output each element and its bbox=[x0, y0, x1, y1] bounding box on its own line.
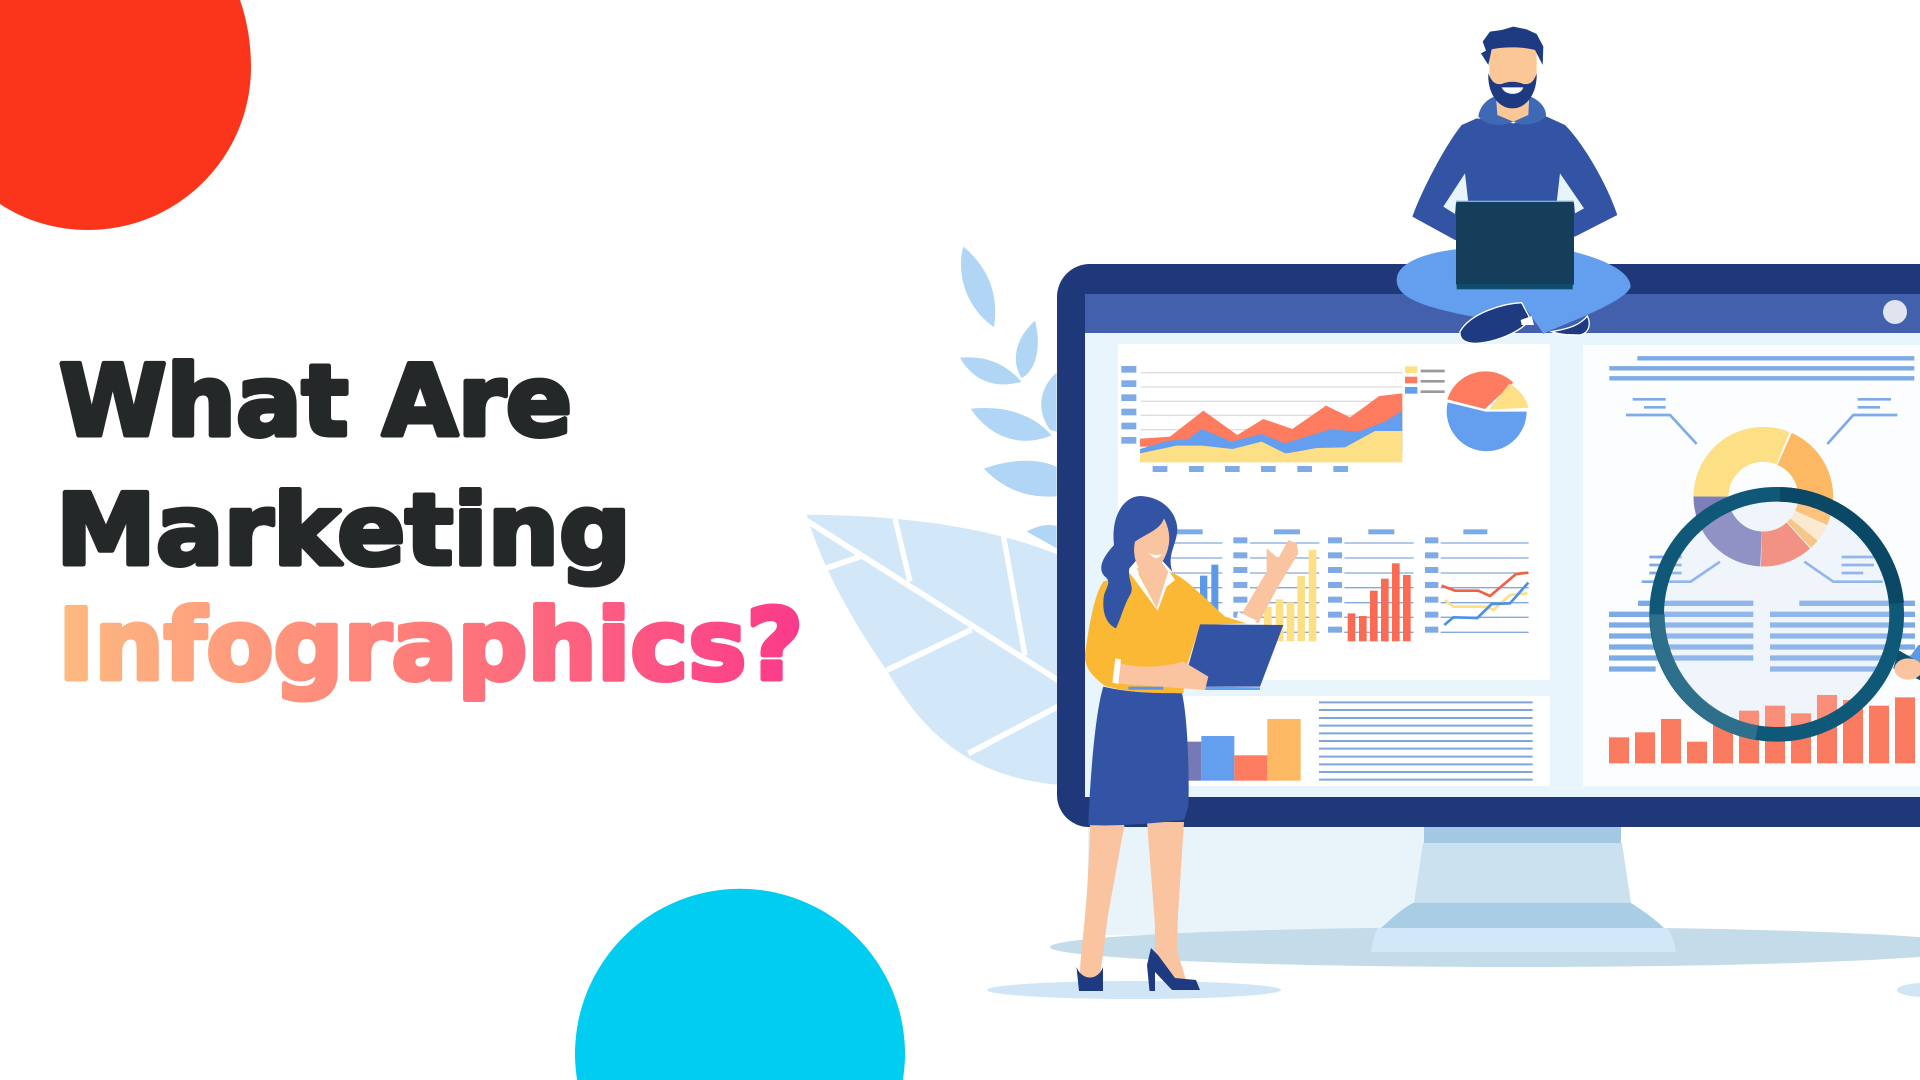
area chart x labels bbox=[1153, 466, 1348, 472]
woman: smile bbox=[1148, 553, 1162, 558]
title bar button bbox=[1883, 300, 1907, 324]
pie chart bbox=[1447, 371, 1529, 451]
chart legend bbox=[1405, 366, 1445, 394]
man: sock bbox=[1521, 316, 1534, 325]
woman: neck and chest bbox=[1137, 560, 1168, 608]
woman: collar bbox=[1130, 567, 1175, 611]
man: hair bbox=[1481, 27, 1543, 65]
floor shadow: monitor bbox=[1050, 927, 1920, 967]
man: smile bbox=[1502, 87, 1523, 94]
line chart bbox=[1442, 573, 1528, 625]
man: beard bbox=[1488, 73, 1537, 108]
man: arm gaps bbox=[1443, 173, 1584, 214]
red bar chart bbox=[1348, 563, 1411, 641]
report panel contents bbox=[1609, 358, 1920, 763]
woman: face bbox=[1134, 518, 1169, 573]
woman: raised arm bbox=[1240, 540, 1298, 623]
blue bar chart bbox=[1200, 565, 1218, 639]
panel: right report bbox=[1583, 345, 1920, 786]
woman: hair bbox=[1101, 496, 1177, 628]
woman: left shoe bbox=[1076, 967, 1103, 991]
woman: belt bbox=[1128, 687, 1163, 690]
title line: Infographics?: Infographics? bbox=[58, 589, 803, 703]
panel: lower dashboard bbox=[1118, 696, 1550, 786]
man: laptop bbox=[1456, 201, 1574, 289]
chart titles bbox=[1177, 529, 1487, 534]
area chart bbox=[1140, 393, 1402, 462]
floor shadow: right edge bbox=[1897, 983, 1920, 997]
man sitting with laptop bbox=[1397, 27, 1631, 343]
donut callouts bbox=[1626, 399, 1897, 582]
woman: forearm and hand bbox=[1115, 662, 1208, 690]
donut chart bbox=[1689, 423, 1837, 571]
yellow bar chart bbox=[1264, 550, 1316, 641]
woman: left leg bbox=[1080, 822, 1125, 980]
report paragraphs bbox=[1609, 603, 1915, 669]
woman legs and shoes bbox=[1076, 822, 1200, 991]
man: hood bbox=[1478, 96, 1546, 125]
woman: cuff bbox=[1237, 612, 1257, 625]
man: head bbox=[1489, 42, 1537, 105]
large pale leaf bbox=[803, 515, 1060, 785]
area chart y labels bbox=[1121, 366, 1136, 444]
monitor stand back panel bbox=[1088, 827, 1428, 935]
man: legs bbox=[1397, 249, 1631, 333]
monitor stand bbox=[1371, 827, 1676, 952]
lower colour bar chart bbox=[1187, 719, 1301, 781]
title bbox=[56, 345, 803, 703]
floor shadow: woman bbox=[987, 981, 1281, 999]
title line: Marketing: Marketing bbox=[56, 474, 631, 588]
man: shoes bbox=[1460, 303, 1589, 343]
small charts row bbox=[1168, 529, 1533, 781]
background foliage bbox=[803, 247, 1060, 785]
woman presenting bbox=[1085, 496, 1298, 825]
decorative cyan circle bbox=[575, 889, 905, 1080]
woman: sleeve cuff bbox=[1112, 658, 1121, 684]
panel: upper dashboard bbox=[1118, 344, 1550, 680]
decorative red circle bbox=[0, 0, 251, 230]
man: neck bbox=[1497, 100, 1528, 121]
man: front shin bbox=[1523, 299, 1588, 334]
small blue leaves bbox=[960, 247, 1057, 548]
woman: right shoe bbox=[1147, 948, 1200, 991]
man: hoodie bbox=[1412, 117, 1617, 240]
title line: What Are: What Are bbox=[59, 345, 572, 459]
lens glass tint bbox=[1662, 499, 1892, 729]
lower text lines bbox=[1319, 702, 1533, 780]
report header lines bbox=[1609, 358, 1914, 378]
woman: clipboard bbox=[1187, 624, 1283, 690]
row labels bbox=[1233, 537, 1438, 633]
area chart and pie bbox=[1121, 366, 1529, 472]
woman: shirt bbox=[1085, 573, 1247, 693]
magnifying glass bbox=[1657, 494, 1920, 734]
monitor screen background bbox=[1085, 333, 1920, 797]
report bar chart bbox=[1609, 695, 1915, 763]
monitor title bar bbox=[1085, 294, 1920, 333]
woman: skirt bbox=[1088, 687, 1189, 825]
woman: right leg bbox=[1147, 822, 1186, 982]
monitor frame bbox=[1057, 264, 1920, 827]
